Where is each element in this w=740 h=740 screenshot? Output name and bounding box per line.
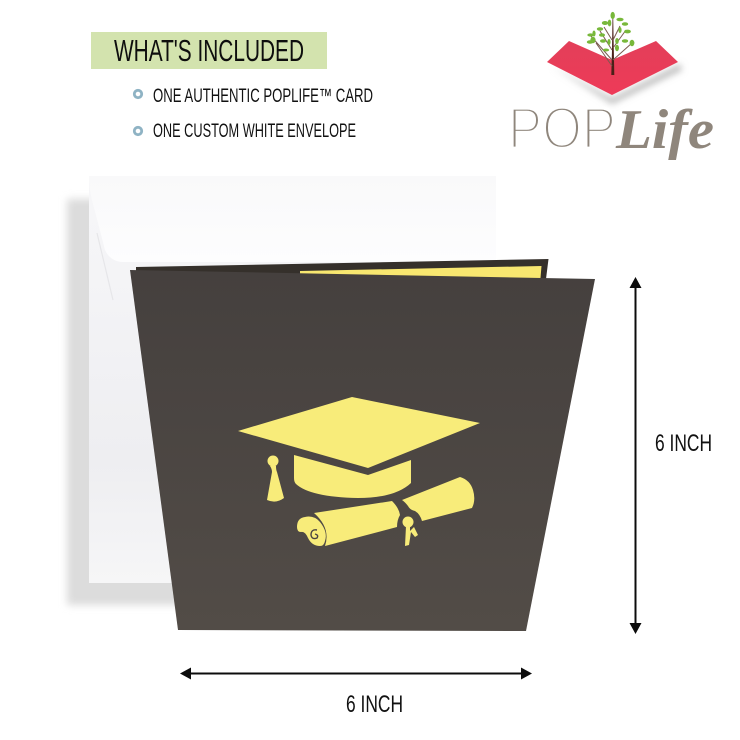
height label: 6 INCH — [655, 430, 712, 457]
scroll right body — [402, 477, 474, 521]
logo book shadow — [552, 64, 682, 104]
bullet: white envelope: ONE CUSTOM WHITE ENVELOPE — [153, 121, 356, 142]
envelope shadow — [67, 199, 190, 605]
cap band — [294, 455, 411, 498]
envelope flap — [89, 176, 496, 262]
logo red book — [547, 41, 678, 95]
poplife logo — [508, 12, 714, 161]
graduation cap and diploma — [238, 397, 480, 546]
cap board — [238, 397, 480, 468]
horizontal dimension arrow — [180, 668, 532, 680]
bullet: white envelope — [134, 121, 356, 142]
scroll left body — [314, 501, 400, 546]
logo wordmark Life: Life — [615, 99, 714, 161]
yellow card interior — [300, 266, 542, 278]
white envelope — [89, 176, 496, 583]
diploma scroll — [297, 477, 474, 546]
bullet list — [134, 86, 373, 142]
what's included heading: WHAT'S INCLUDED — [114, 33, 304, 68]
bullet: authentic card: ONE AUTHENTIC POPLIFE™ CARD — [153, 86, 373, 107]
cap tassel — [267, 456, 284, 502]
diploma knot — [402, 516, 418, 546]
vertical dimension arrow — [630, 277, 642, 634]
card back panel — [136, 259, 548, 279]
bullet: authentic card — [134, 86, 373, 107]
width label: 6 INCH — [346, 691, 403, 718]
logo wordmark POP: POP — [508, 96, 616, 161]
what's included heading — [91, 32, 327, 69]
card front — [130, 270, 595, 631]
scroll curl — [297, 517, 326, 546]
logo tree — [587, 12, 634, 75]
